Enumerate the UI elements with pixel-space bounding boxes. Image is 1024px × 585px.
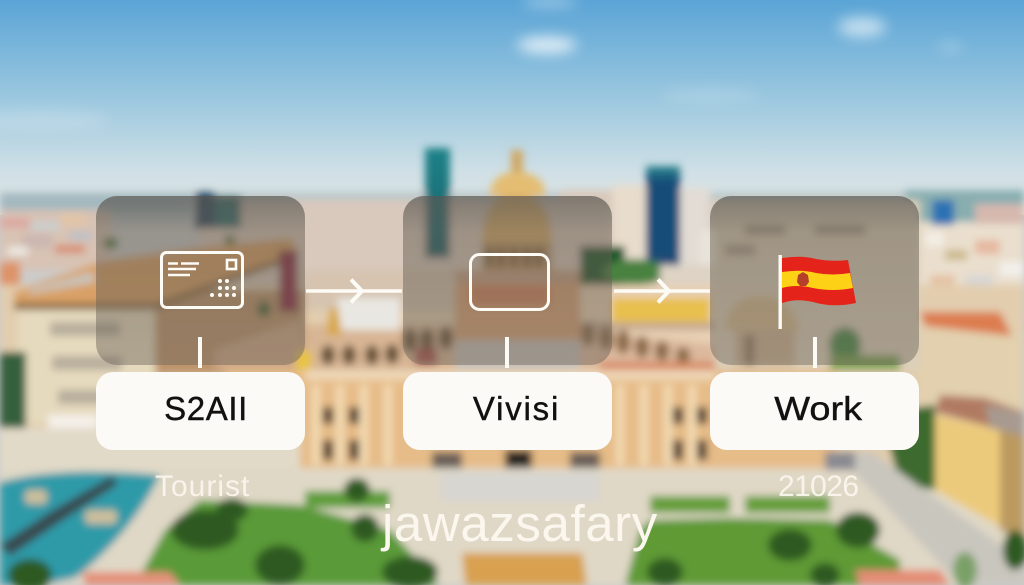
- tree cluster: [580, 246, 625, 286]
- label: Vivisi: Vivisi: [473, 390, 560, 427]
- caption: 21026: 21026: [778, 470, 858, 503]
- panel: work step: [710, 196, 919, 365]
- left building: [18, 303, 158, 423]
- connector stem 2: [505, 337, 508, 368]
- label: Work: Work: [774, 390, 862, 427]
- caption: Tourist: Tourist: [155, 470, 250, 503]
- gardens: [135, 500, 440, 585]
- front portico: [225, 370, 835, 470]
- arrow 1: [306, 278, 402, 304]
- plaza: [0, 428, 300, 585]
- horizon: [0, 192, 1024, 222]
- label: Work: [710, 372, 919, 450]
- icon: empty rounded rectangle: [469, 253, 550, 311]
- label: S2AII: [96, 372, 305, 450]
- central palace: [511, 150, 523, 180]
- small green spots: [103, 237, 117, 249]
- main ground: [0, 285, 1024, 475]
- right arcade: [580, 285, 715, 370]
- icon: Spanish flag: [778, 255, 856, 329]
- label: S2AII: S2AII: [164, 390, 248, 427]
- right distant city mottled: [920, 222, 1024, 317]
- right buildings: [920, 330, 1024, 410]
- dome behind work panel: [715, 200, 920, 370]
- fountain pool: [0, 472, 160, 585]
- left arcade: [305, 325, 455, 375]
- connector stem 3: [813, 337, 816, 368]
- panel: visa step: [403, 196, 612, 365]
- connector stem 1: [198, 337, 202, 368]
- left distant city mottled: [0, 210, 110, 270]
- icon: card: [160, 251, 244, 309]
- skyline buildings: [612, 185, 646, 263]
- arrow 2: [614, 278, 710, 304]
- panel: passport card step: [96, 196, 305, 365]
- label: Vivisi: [403, 372, 612, 450]
- title: jawazsafary: jawazsafary: [382, 495, 658, 552]
